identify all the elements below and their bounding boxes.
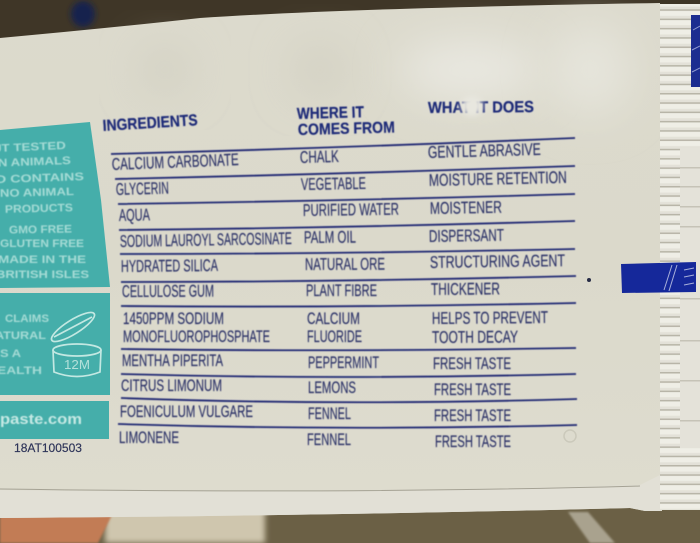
what it does column: FRESH TASTE <box>435 432 511 451</box>
ingredients column <box>111 150 292 447</box>
ingredients column: MONOFLUOROPHOSPHATE <box>123 327 270 346</box>
ingredients column: MENTHA PIPERITA <box>122 351 223 370</box>
where it comes from column: NATURAL ORE <box>305 255 385 274</box>
what it does column: STRUCTURING AGENT <box>430 251 565 272</box>
where it comes from column: PALM OIL <box>304 228 356 247</box>
where it comes from column <box>300 147 399 449</box>
what it does column: FRESH TASTE <box>434 380 511 399</box>
what it does column: GENTLE ABRASIVE <box>428 140 541 162</box>
teal panel: claims <box>0 122 110 288</box>
background: lower surface <box>0 500 700 543</box>
ingredients column: CELLULOSE GUM <box>122 282 214 301</box>
blue registration bar <box>621 262 696 293</box>
tube shading and glare <box>143 25 630 115</box>
ingredients column: HYDRATED SILICA <box>121 256 218 276</box>
where it comes from column: VEGETABLE <box>301 174 366 194</box>
column heading: ingredients: INGREDIENTS <box>102 112 198 135</box>
column heading: where it comes from <box>297 104 395 139</box>
background: dark top <box>0 0 700 60</box>
teal panel: claims: GMO FREE <box>9 223 72 237</box>
teal panel: claims: MADE IN THE <box>0 254 86 266</box>
tube fold line <box>0 486 640 491</box>
teal panel: claims: GLUTEN FREE <box>0 238 84 250</box>
hand holding the tube <box>0 515 112 543</box>
where it comes from column: FENNEL <box>307 430 351 449</box>
teal panel: claims: PRODUCTS <box>5 202 73 216</box>
column heading: what it does: WHAT IT DOES <box>428 99 534 117</box>
where it comes from column: PURIFIED WATER <box>303 200 399 220</box>
teal panel: website: paste.com <box>0 411 82 428</box>
batch code: 18AT100503 <box>14 441 82 455</box>
teal panel: claims: NO ANIMAL <box>0 186 74 200</box>
what it does column: TOOTH DECAY <box>432 327 518 347</box>
ingredients column: AQUA <box>119 205 150 225</box>
ingredients column: FOENICULUM VULGARE <box>120 402 253 421</box>
background: dark blue object <box>71 1 95 27</box>
crimped end of tube <box>660 4 700 510</box>
ingredients column: SODIUM LAUROYL SARCOSINATE <box>120 229 292 251</box>
ingredients column: 1450PPM SODIUM <box>123 309 224 328</box>
tube bottom fold strip <box>0 475 660 518</box>
black dot <box>587 278 591 282</box>
icon: open jar 12M: 12M <box>64 357 90 372</box>
what it does column: FRESH TASTE <box>433 354 511 373</box>
column heading: where it comes from: COMES FROM <box>298 119 395 139</box>
what it does column: FRESH TASTE <box>434 406 511 425</box>
where it comes from column: LEMONS <box>308 378 356 397</box>
ingredients column: GLYCERIN <box>116 179 169 199</box>
where it comes from column: CHALK <box>300 147 340 167</box>
ingredients column: CALCIUM CARBONATE <box>111 150 239 174</box>
teal panel: claims and period-after-opening icon: S A <box>0 348 21 360</box>
what it does column: MOISTENER <box>430 198 502 218</box>
where it comes from column: PLANT FIBRE <box>306 281 377 300</box>
column heading: where it comes from: WHERE IT <box>297 104 364 123</box>
where it comes from column: FENNEL <box>308 404 351 423</box>
teal panel: claims and period-after-opening icon <box>0 293 110 395</box>
table rules <box>111 138 577 428</box>
small ring mark <box>564 430 576 442</box>
what it does column: DISPERSANT <box>429 226 504 246</box>
glare over heading <box>461 96 483 116</box>
where it comes from column: CALCIUM <box>307 309 360 328</box>
teal panel: website <box>0 401 109 439</box>
ingredients column: CITRUS LIMONUM <box>121 376 222 395</box>
ingredients column: LIMONENE <box>119 428 179 447</box>
where it comes from column: FLUORIDE <box>307 327 362 346</box>
teal panel: claims and period-after-opening icon: CLAIMS <box>5 313 49 325</box>
what it does column <box>428 140 567 451</box>
where it comes from column: PEPPERMINT <box>308 353 379 372</box>
what it does column: MOISTURE RETENTION <box>429 168 567 190</box>
blue mark on crimp <box>691 15 700 87</box>
what it does column: HELPS TO PREVENT <box>432 308 548 328</box>
what it does column: THICKENER <box>431 279 500 299</box>
